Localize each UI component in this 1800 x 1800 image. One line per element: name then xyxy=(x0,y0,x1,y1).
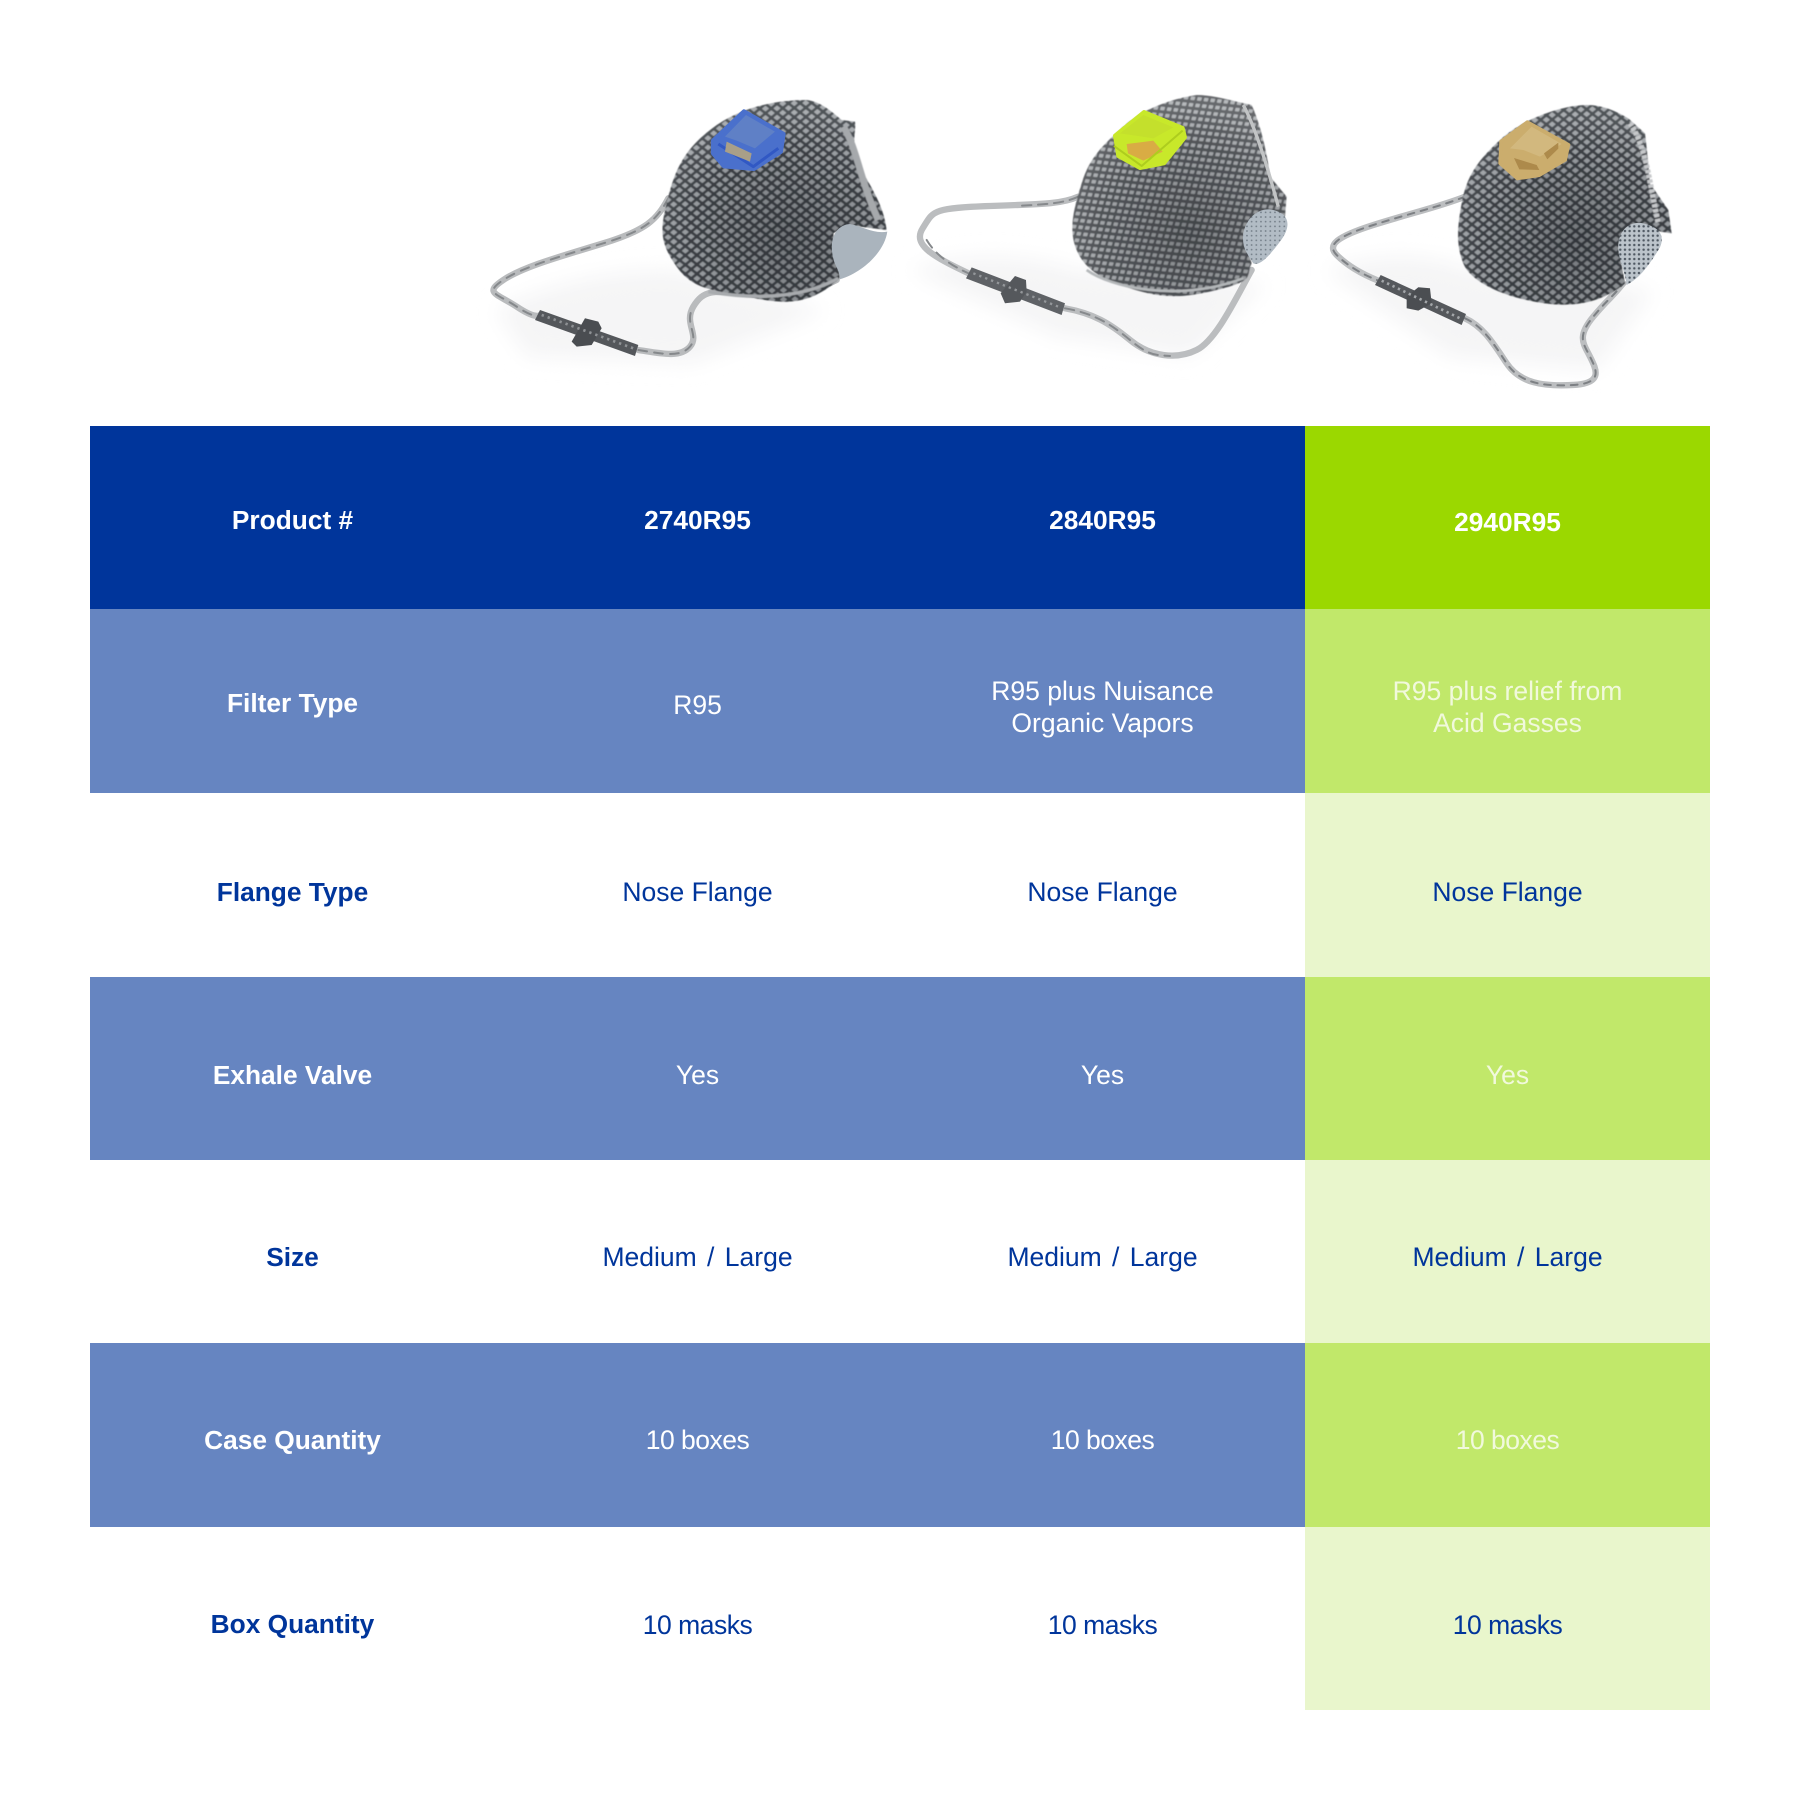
green cell: R95 plus relief from Acid Gasses: R95 plus relief from xyxy=(1393,676,1622,706)
mask 2 valve xyxy=(1114,112,1185,168)
value: 2740R95: 2740R95 xyxy=(644,505,751,535)
row: Product # xyxy=(90,426,1710,610)
mask 1 head strap xyxy=(493,198,837,354)
mask 3 head strap xyxy=(1333,197,1623,385)
value: 10 boxes: 10 boxes xyxy=(1051,1425,1154,1455)
mask 3 body xyxy=(1458,105,1672,305)
value: 10 masks: 10 masks xyxy=(1048,1610,1157,1640)
row: Size xyxy=(266,1160,1710,1343)
row label: Filter Type: Filter Type xyxy=(227,688,358,718)
green cell: R95 plus relief from Acid Gasses: Acid Gasses xyxy=(1433,708,1582,738)
row: Box Quantity xyxy=(211,1527,1710,1710)
value: Medium / Large: Medium / Large xyxy=(602,1242,793,1272)
value: Medium / Large: Medium / Large xyxy=(1007,1242,1198,1272)
value: R95 plus Nuisance Organic Vapors: R95 plus Nuisance xyxy=(991,676,1214,706)
mask 2 head strap xyxy=(920,197,1252,356)
mask photo: 2740R95 with blue valve xyxy=(493,100,887,363)
row: Flange Type xyxy=(217,793,1710,977)
value: R95: R95 xyxy=(673,690,722,720)
green cell: Medium / Large xyxy=(1305,1160,1710,1343)
row label: Size: Size xyxy=(266,1242,319,1272)
green cell: 10 boxes xyxy=(1305,1343,1710,1527)
product photos: three respirator masks xyxy=(490,94,1672,388)
green cell: Nose Flange: Nose Flange xyxy=(1432,877,1583,907)
row label: Box Quantity: Box Quantity xyxy=(211,1609,374,1639)
value: Yes: Yes xyxy=(1081,1060,1124,1090)
mask 2 ear tab xyxy=(1243,209,1287,264)
row label: Product #: Product # xyxy=(232,505,353,535)
mask 1 body xyxy=(662,100,887,302)
value: Nose Flange: Nose Flange xyxy=(622,877,773,907)
mask 1 valve xyxy=(713,112,783,169)
row: Filter Type xyxy=(90,609,1710,793)
green cell: Nose Flange xyxy=(1305,793,1710,977)
mask 3 strap adjuster xyxy=(1375,275,1466,325)
green column header: 2940R95 xyxy=(1305,426,1710,610)
mask 2 strap adjuster xyxy=(966,267,1065,315)
mask 3 ear tab xyxy=(1618,223,1662,285)
green cell: 10 boxes: 10 boxes xyxy=(1456,1425,1559,1455)
row label: Exhale Valve: Exhale Valve xyxy=(213,1060,372,1090)
mask 3 valve xyxy=(1500,122,1569,179)
mask 2 upper strap xyxy=(1243,105,1278,207)
green cell: Yes xyxy=(1305,977,1710,1160)
value: Nose Flange: Nose Flange xyxy=(1027,877,1178,907)
green cell: Yes: Yes xyxy=(1486,1060,1529,1090)
comparison table xyxy=(90,426,1710,1710)
value: 2840R95: 2840R95 xyxy=(1049,505,1156,535)
row label: Case Quantity: Case Quantity xyxy=(204,1425,381,1455)
value: 10 boxes: 10 boxes xyxy=(646,1425,749,1455)
green cell: Medium / Large: Medium / Large xyxy=(1412,1242,1603,1272)
row: Exhale Valve xyxy=(90,977,1710,1160)
green cell: R95 plus relief from Acid Gasses xyxy=(1305,609,1710,793)
row: Case Quantity xyxy=(90,1343,1710,1527)
green cell: 10 masks xyxy=(1305,1527,1710,1710)
mask 1 ear tab xyxy=(832,224,887,279)
value: R95 plus Nuisance Organic Vapors xyxy=(991,676,1214,738)
value: 10 masks: 10 masks xyxy=(643,1610,752,1640)
mask photo: 2940R95 with tan valve xyxy=(1327,105,1672,385)
green cell: 10 masks: 10 masks xyxy=(1453,1610,1562,1640)
green column header: 2940R95: 2940R95 xyxy=(1454,507,1561,537)
value: Yes: Yes xyxy=(676,1060,719,1090)
row label: Flange Type: Flange Type xyxy=(217,877,368,907)
value: R95 plus Nuisance Organic Vapors: Organic Vapors xyxy=(1011,708,1194,738)
mask 2 body xyxy=(1072,95,1287,296)
mask 1 strap adjuster xyxy=(535,310,638,356)
mask photo: 2840R95 with yellow valve xyxy=(910,95,1287,357)
